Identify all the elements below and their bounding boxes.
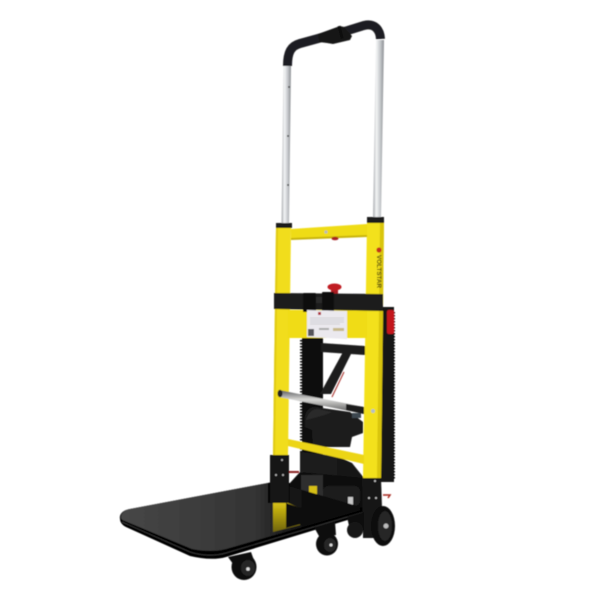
- telescopic handle tubes: [282, 40, 384, 224]
- motor housing: [305, 407, 363, 447]
- small stair wheel: [347, 512, 364, 538]
- rear large wheel: [371, 506, 395, 546]
- black strap: [274, 292, 383, 312]
- rear black climbing tracks: [301, 307, 394, 482]
- brand logo on upright: [375, 247, 382, 289]
- drive motor and control box: [289, 472, 364, 526]
- handle grip: [288, 25, 380, 66]
- emergency stop button: [328, 284, 342, 294]
- red reflector: [387, 310, 394, 334]
- middle caster: [314, 522, 338, 556]
- QR code: [308, 329, 314, 336]
- lower right bracket: [362, 478, 390, 538]
- front caster: [228, 552, 256, 580]
- gearbox block below motor: [300, 452, 364, 480]
- small red stud under crossbar: [332, 237, 338, 240]
- deck rim highlight: [122, 512, 364, 555]
- lower left bracket: [270, 455, 299, 503]
- chrome cross bar: [278, 390, 375, 414]
- brand logo on upright: VOLTSTAR: [375, 255, 381, 289]
- diagonal lift arm: [320, 352, 351, 397]
- yellow frame: [273, 222, 384, 478]
- deck reflection of yellow frame: [273, 503, 300, 532]
- deck: [120, 482, 366, 559]
- white specification label: [307, 310, 347, 339]
- frame caps: [276, 217, 384, 228]
- frame bolt: [324, 230, 328, 234]
